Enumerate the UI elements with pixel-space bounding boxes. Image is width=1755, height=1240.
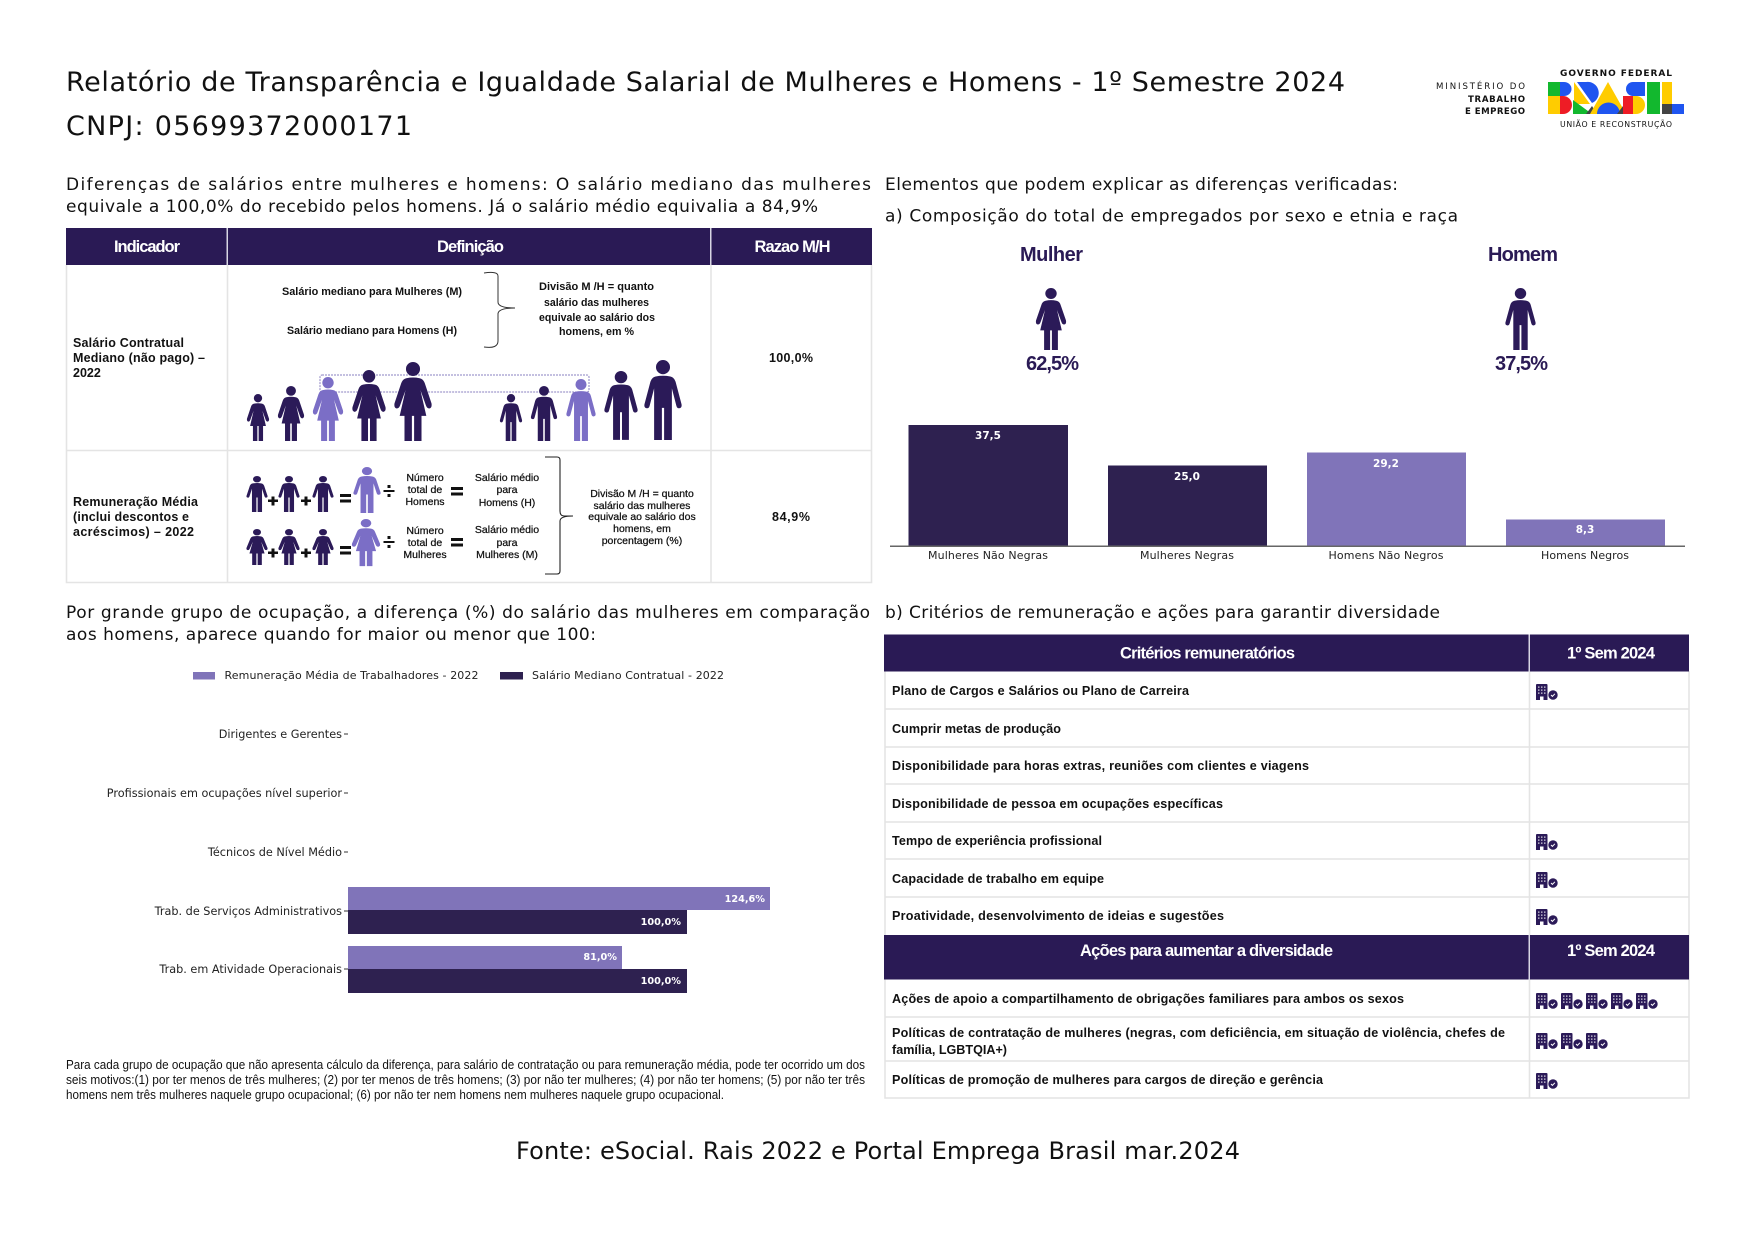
formula: homens: Número: [406, 472, 444, 484]
logo: ministério e governo federal: TRABALHO: [1468, 95, 1525, 105]
bar chart: grupos de ocupação: Trab. de Serviços Administrativos: [154, 905, 342, 918]
bar chart: composição por sexo e raça: [890, 425, 1685, 562]
action rows: [892, 992, 1505, 1087]
action rows: Políticas de promoção de mulheres para cargos de direção e gerência: [892, 1073, 1324, 1087]
footnote: seis motivos:(1) por ter menos de três mulheres; (2) por ter menos de três homens; (3) por não ter mulheres; (4) por não ter homens; (5) por não ter três: [66, 1072, 865, 1087]
bar chart: grupos de ocupação: Técnicos de Nível Médio: [207, 846, 342, 859]
bracket and explanation: porcentagem (%): [602, 535, 682, 547]
bar chart: grupos de ocupação: [107, 728, 770, 993]
header: ações: [884, 935, 1689, 980]
definition: salário mediano: Salário mediano para Homens (H): [287, 325, 457, 337]
panel: tabela indicadores: [66, 228, 872, 582]
bracket and explanation: Divisão M /H = quanto: [590, 488, 694, 500]
heading: elementos que podem explicar: a) Composição do total de empregados por sexo e etnia e raça: [885, 206, 1458, 226]
panel: critérios remuneratórios e ações: [884, 634, 1689, 1098]
formula: mulheres: Número: [406, 525, 444, 537]
criteria rows: Tempo de experiência profissional: [892, 834, 1102, 848]
table header: Razao M/H: [754, 238, 830, 256]
bar chart: composição por sexo e raça: Mulheres Negras: [1140, 549, 1234, 562]
row label: salário contratual: [73, 336, 205, 380]
title: CNPJ: 05699372000171: [66, 111, 412, 142]
definition: salário mediano: Divisão M /H = quanto: [539, 281, 654, 293]
logo: ministério e governo federal: UNIÃO E RECONSTRUÇÃO: [1560, 120, 1672, 129]
row label: remuneração média: (inclui descontos e: [73, 510, 189, 524]
value: 100,0%: 100,0%: [769, 351, 813, 365]
bar chart: grupos de ocupação: 100,0%: [641, 976, 681, 987]
header: critérios: [884, 634, 1689, 672]
chart legend: Remuneração Média de Trabalhadores - 2022: [224, 669, 478, 682]
bracket and explanation: [545, 457, 696, 574]
panel: homem: Homem: [1488, 244, 1558, 266]
formula: homens: [246, 467, 539, 513]
bar chart: composição por sexo e raça: 37,5: [975, 430, 1001, 442]
bracket and explanation: homens, em: [613, 523, 671, 535]
heading: por grande grupo de ocupação: Por grande grupo de ocupação, a diferença (%) do salário das mulheres em comparação: [66, 603, 870, 623]
footnote: [66, 1057, 865, 1102]
formula: homens: Homens (H): [479, 497, 535, 509]
bar chart: composição por sexo e raça: 8,3: [1576, 524, 1594, 536]
action rows: família, LGBTQIA+): [892, 1043, 1007, 1057]
bar chart: grupos de ocupação: Profissionais em ocupações nível superior: [107, 787, 342, 800]
people row: mediana: [247, 360, 682, 441]
bracket and explanation: salário das mulheres: [594, 500, 690, 512]
header: critérios: 1º Sem 2024: [1567, 644, 1656, 662]
criteria rows: Disponibilidade de pessoa em ocupações específicas: [892, 797, 1223, 811]
table header: Definição: [437, 238, 504, 256]
definition: salário mediano: [282, 272, 655, 347]
panel: mulher: Mulher: [1020, 244, 1083, 266]
bar chart: grupos de ocupação: 124,6%: [725, 894, 765, 905]
heading: elementos que podem explicar: [885, 175, 1458, 226]
action rows: Políticas de contratação de mulheres (negras, com deficiência, em situação de violência, chefes de: [892, 1026, 1505, 1040]
logo: ministério e governo federal: MINISTÉRIO DO: [1436, 80, 1525, 92]
footnote: Para cada grupo de ocupação que não apresenta cálculo da diferença, para salário de contratação ou para remuneração média, pode ter ocorrido um dos: [66, 1057, 865, 1072]
criteria rows: Proatividade, desenvolvimento de ideias e sugestões: [892, 909, 1224, 923]
bar chart: composição por sexo e raça: 29,2: [1373, 458, 1399, 470]
row label: remuneração média: acréscimos) – 2022: [73, 525, 194, 539]
heading: elementos que podem explicar: Elementos que podem explicar as diferenças verificadas:: [885, 175, 1398, 195]
bar chart: composição por sexo e raça: Mulheres Não Negras: [928, 549, 1048, 562]
row label: salário contratual: 2022: [73, 366, 101, 380]
header: critérios: Critérios remuneratórios: [1120, 644, 1295, 662]
value: 84,9%: 84,9%: [772, 510, 810, 524]
bar chart: grupos de ocupação: 100,0%: [641, 917, 681, 928]
title: Relatório de Transparência e Igualdade Salarial de Mulheres e Homens - 1º Semestre 2024: [66, 67, 1345, 98]
footnote: homens nem três mulheres naquele grupo ocupacional; (6) por não ter nem homens nem mulheres naquele grupo ocupacional.: [66, 1087, 724, 1102]
formula: homens: total de: [408, 484, 442, 496]
bar chart: grupos de ocupação: 81,0%: [583, 952, 617, 963]
panel: mulher: 62,5%: [1026, 353, 1079, 375]
icons: ações: [1536, 993, 1658, 1089]
table header: Indicador: [114, 238, 181, 256]
intro text: diferenças de salários: equivale a 100,0% do recebido pelos homens. Já o salário médio equivalia a 84,9%: [66, 197, 818, 217]
formula: homens: Salário médio: [475, 472, 539, 484]
definition: salário mediano: Salário mediano para Mulheres (M): [282, 286, 462, 298]
definition: salário mediano: salário das mulheres: [544, 297, 649, 309]
chart legend: Salário Mediano Contratual - 2022: [532, 669, 724, 682]
bar chart: grupos de ocupação: Dirigentes e Gerentes: [219, 728, 342, 741]
formula: mulheres: Salário médio: [475, 524, 539, 536]
source line: Fonte: eSocial. Rais 2022 e Portal Emprega Brasil mar.2024: [516, 1137, 1240, 1165]
heading: por grande grupo de ocupação: [66, 603, 870, 645]
title: [66, 67, 1345, 142]
formula: mulheres: total de: [408, 537, 442, 549]
definition: salário mediano: equivale ao salário dos: [539, 312, 655, 324]
action rows: Ações de apoio a compartilhamento de obrigações familiares para ambos os sexos: [892, 992, 1404, 1006]
intro text: diferenças de salários: Diferenças de salários entre mulheres e homens: O salário mediano das mulheres: [66, 175, 871, 195]
formula: mulheres: [246, 519, 539, 566]
heading: critérios de remuneração: b) Critérios de remuneração e ações para garantir diversidade: [885, 603, 1440, 623]
icon: mulher: [1036, 288, 1066, 350]
row label: remuneração média: [73, 495, 199, 539]
row label: salário contratual: Mediano (não pago) –: [73, 351, 205, 365]
header: ações: Ações para aumentar a diversidade: [1080, 942, 1333, 960]
definition: salário mediano: homens, em %: [559, 326, 634, 338]
heading: por grande grupo de ocupação: aos homens, aparece quando for maior ou menor que 100:: [66, 625, 596, 645]
criteria rows: [892, 684, 1309, 923]
header: ações: 1º Sem 2024: [1567, 942, 1656, 960]
logo: ministério e governo federal: E EMPREGO: [1465, 107, 1525, 117]
formula: mulheres: Mulheres (M): [476, 549, 538, 561]
formula: homens: para: [496, 484, 518, 496]
row label: remuneração média: Remuneração Média: [73, 495, 199, 509]
panel: homem: 37,5%: [1495, 353, 1548, 375]
icons: critérios: [1536, 684, 1558, 925]
bar chart: grupos de ocupação: Trab. em Atividade Operacionais: [158, 963, 342, 976]
logo: ministério e governo federal: [1436, 69, 1684, 129]
criteria rows: Disponibilidade para horas extras, reuniões com clientes e viagens: [892, 759, 1309, 773]
panel: mulher: [1020, 244, 1083, 375]
chart legend: [193, 669, 724, 682]
bar chart: composição por sexo e raça: Homens Não Negros: [1328, 549, 1444, 562]
panel: homem: [1488, 244, 1558, 375]
bracket and explanation: equivale ao salário dos: [588, 511, 696, 523]
logo: ministério e governo federal: GOVERNO FEDERAL: [1560, 69, 1672, 79]
bar chart: composição por sexo e raça: Homens Negros: [1541, 549, 1629, 562]
formula: homens: Homens: [405, 496, 445, 508]
table header: [66, 228, 872, 265]
criteria rows: Plano de Cargos e Salários ou Plano de Carreira: [892, 684, 1190, 698]
formula: mulheres: Mulheres: [403, 549, 447, 561]
bar chart: composição por sexo e raça: 25,0: [1174, 471, 1200, 483]
criteria rows: Capacidade de trabalho em equipe: [892, 872, 1104, 886]
intro text: diferenças de salários: [66, 175, 871, 217]
criteria rows: Cumprir metas de produção: [892, 722, 1061, 736]
row label: salário contratual: Salário Contratual: [73, 336, 184, 350]
icon: homem: [1505, 288, 1536, 350]
formula: mulheres: para: [496, 537, 518, 549]
